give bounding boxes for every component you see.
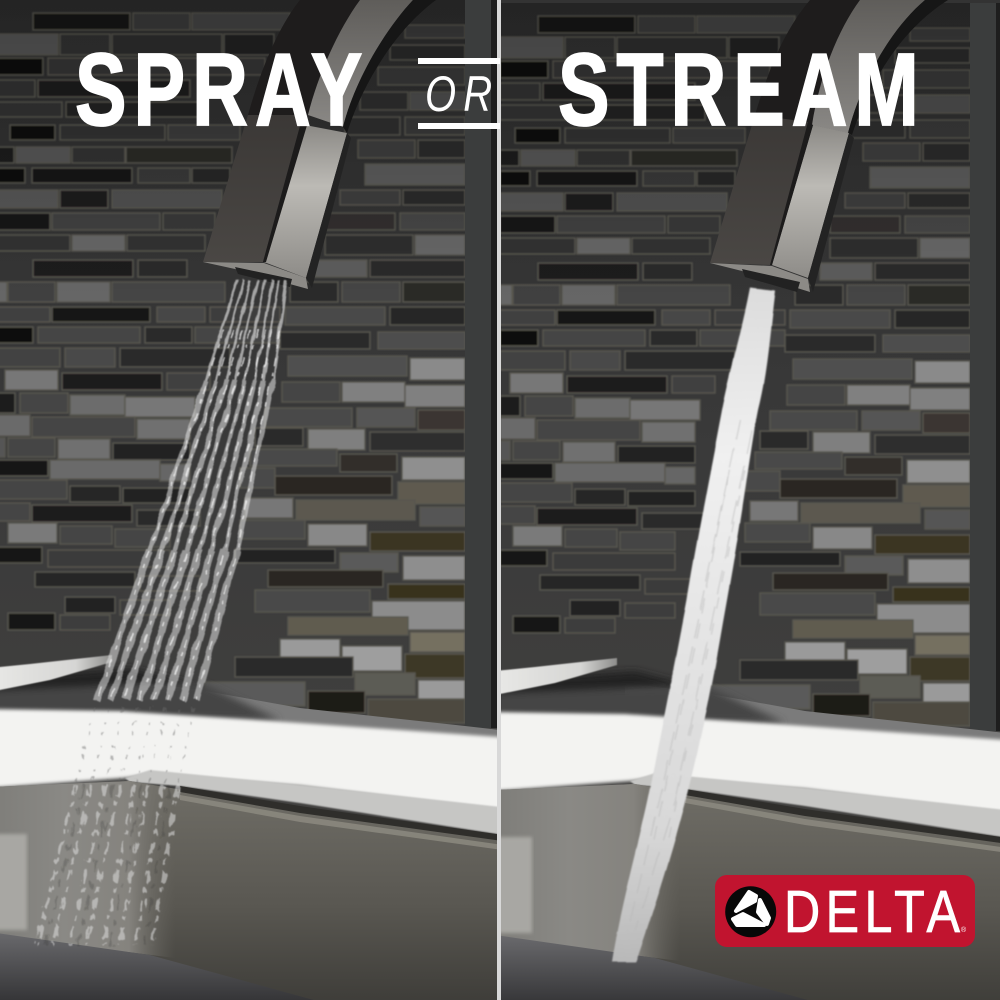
title connector: OR: OR (425, 66, 492, 122)
panel: stream scene (495, 0, 1000, 1000)
title: STREAM: STREAM (558, 33, 919, 148)
faucet: stream head (710, 0, 948, 292)
faucet: spray head (203, 0, 436, 289)
logo: Delta: ® (961, 926, 967, 934)
icon: Delta triangle mark (725, 886, 776, 937)
panel divider (497, 0, 501, 1000)
logo: Delta: DELTA (784, 878, 960, 945)
title connector: OR (418, 58, 500, 129)
water: spray streams (37, 280, 286, 945)
panel: spray scene (0, 0, 510, 1000)
water: solid stream (612, 288, 775, 962)
title: SPRAY: SPRAY (75, 33, 362, 148)
logo: Delta (715, 875, 975, 947)
